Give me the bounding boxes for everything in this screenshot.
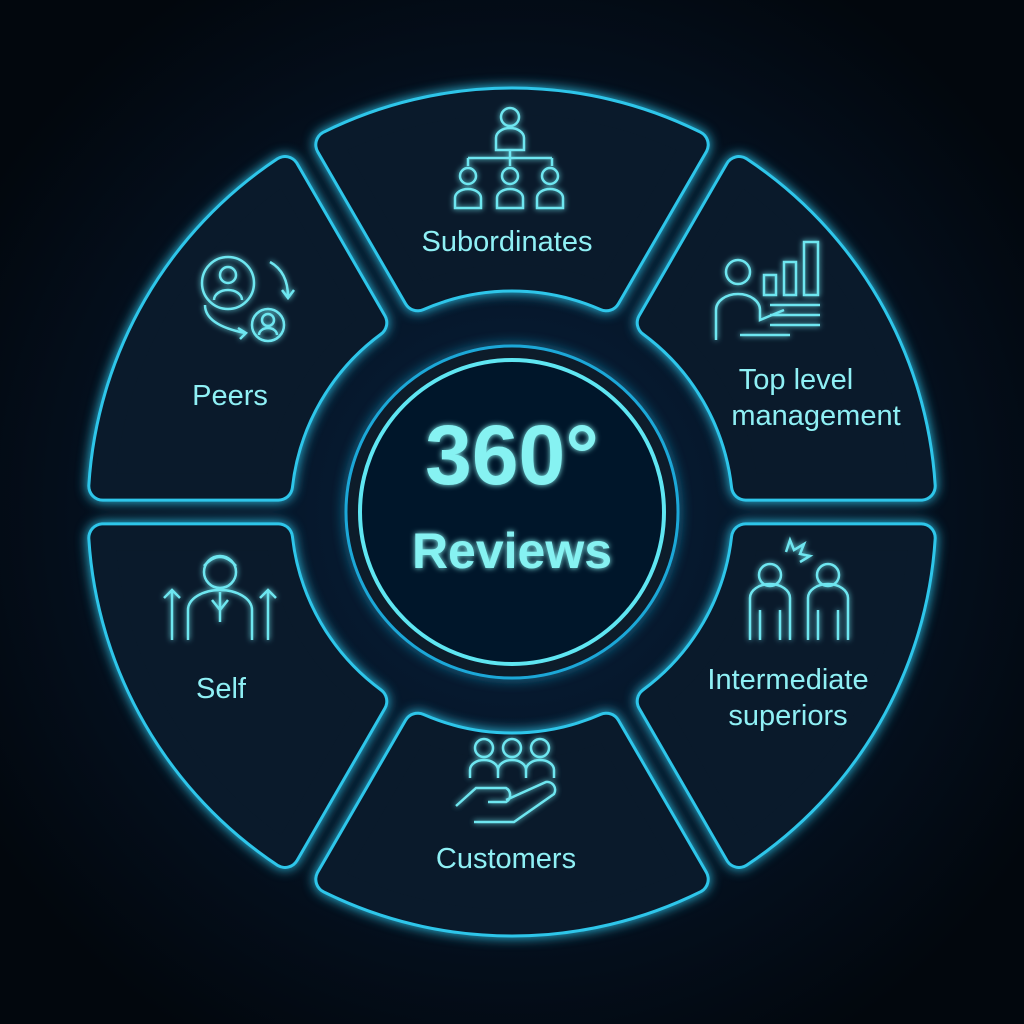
label: Self: Self <box>196 673 247 705</box>
label: Top level management <box>731 364 901 432</box>
label: Intermediate superiors <box>707 664 869 732</box>
title: 360 Reviews: Reviews <box>412 523 612 579</box>
label: Peers: Peers <box>192 380 268 412</box>
icon: intermediate superiors <box>750 540 848 640</box>
title: 360 Reviews <box>412 408 612 579</box>
label: Subordinates: Subordinates <box>422 226 592 258</box>
title: 360 Reviews: 360° <box>425 408 599 502</box>
center circle <box>346 346 678 678</box>
segment ring <box>66 102 958 922</box>
label: Top level management: Top level <box>739 364 853 396</box>
icon: subordinates <box>455 108 563 208</box>
label: Intermediate superiors: Intermediate <box>707 664 869 696</box>
label: Top level management: management <box>731 400 901 432</box>
icon: peers <box>202 257 294 341</box>
label: Intermediate superiors: superiors <box>728 700 848 732</box>
icon: customers <box>456 739 555 822</box>
icon: top level management <box>716 242 820 340</box>
label: Customers: Customers <box>436 843 576 875</box>
icon: self <box>164 556 276 640</box>
